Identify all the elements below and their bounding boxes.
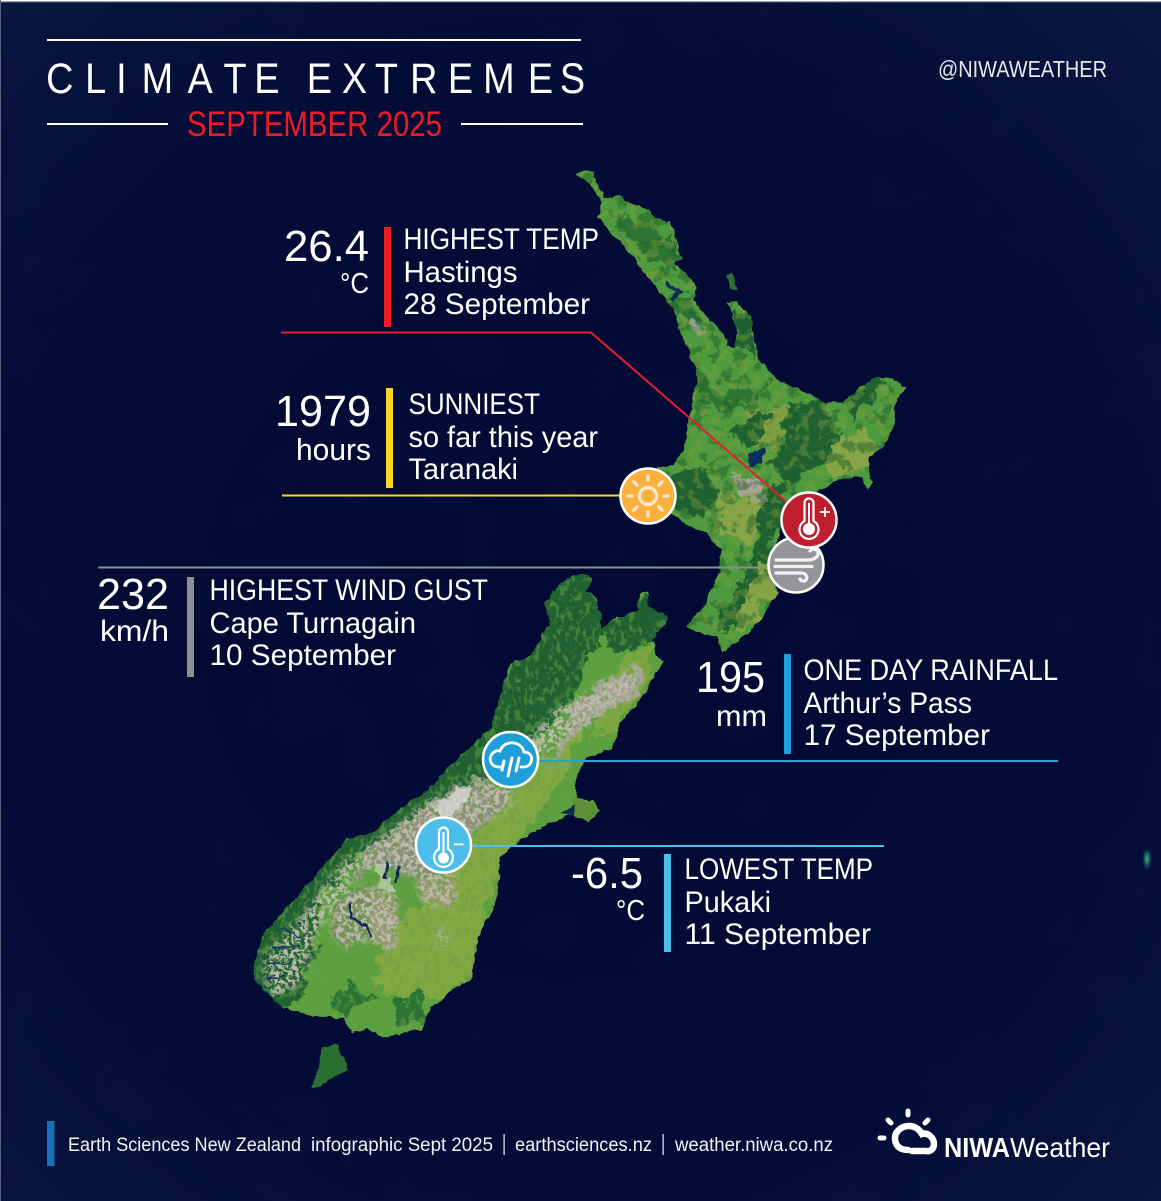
stat: one day rainfall: mm [716,700,767,733]
stat: sunniest: hours [296,432,371,467]
footer credits [47,1121,833,1166]
stat: one day rainfall: 195 [696,653,765,702]
stat: lowest temperature: 11 September [684,918,871,951]
stat: highest temperature: 26.4 [284,222,369,271]
map: North Island [570,165,915,660]
title text: CLIMATE EXTREMES [46,54,585,103]
stat: highest temperature: 28 September [404,288,590,321]
logo: NIWA Weather: Weather [1010,1132,1110,1163]
map: Mahia peninsula [862,477,873,490]
icon: sun [620,468,676,524]
stat: sunniest: SUNNIEST [408,388,540,421]
footer credits: earthsciences.nz [515,1135,652,1156]
map: Stewart Island [312,1044,348,1090]
stat: highest temperature [284,222,599,327]
stat: sunniest: 1979 [275,387,371,436]
stat: one day rainfall: 17 September [804,719,990,752]
stat: lowest temperature: -6.5 [571,849,643,898]
stat: lowest temperature: Pukaki [684,886,771,919]
stat: one day rainfall: Arthur’s Pass [804,687,972,720]
footer credits: weather.niwa.co.nz [674,1135,833,1156]
map: South Island [254,574,668,1088]
stat: one day rainfall: ONE DAY RAINFALL [804,654,1058,687]
stat: highest wind gust: km/h [100,615,169,648]
leader lines [98,332,1058,846]
stat: highest temperature: Hastings [404,256,518,289]
stat: lowest temperature: LOWEST TEMP [684,853,873,886]
stat: one day rainfall [696,653,1058,754]
icon: wind [768,538,824,592]
stat: highest wind gust: Cape Turnagain [210,607,416,640]
stat: highest wind gust: 232 [97,570,169,619]
icon: thermometer cold [416,818,471,872]
stat: sunniest: so far this year [408,421,598,454]
icon: rain cloud [483,732,538,787]
stat: highest temperature: °C [340,268,369,300]
title block [46,39,585,144]
subtitle: SEPTEMBER 2025 [187,105,442,144]
stat: highest wind gust: 10 September [210,639,396,672]
stat: sunniest [275,387,598,488]
stat: sunniest: Taranaki [408,453,518,486]
stat: lowest temperature: °C [616,895,645,927]
stat: highest wind gust: HIGHEST WIND GUST [210,574,488,607]
footer credits: infographic Sept 2025 [311,1135,493,1156]
logo: NIWA Weather [880,1111,1110,1163]
icon: thermometer hot [782,492,836,548]
stat: highest wind gust [97,570,488,677]
handle: @NIWAWEATHER [938,56,1107,82]
stat: lowest temperature [571,849,873,952]
stat: highest temperature: HIGHEST TEMP [404,223,599,256]
logo: NIWA Weather: NIWA [944,1132,1010,1163]
footer credits: Earth Sciences New Zealand [68,1135,301,1156]
